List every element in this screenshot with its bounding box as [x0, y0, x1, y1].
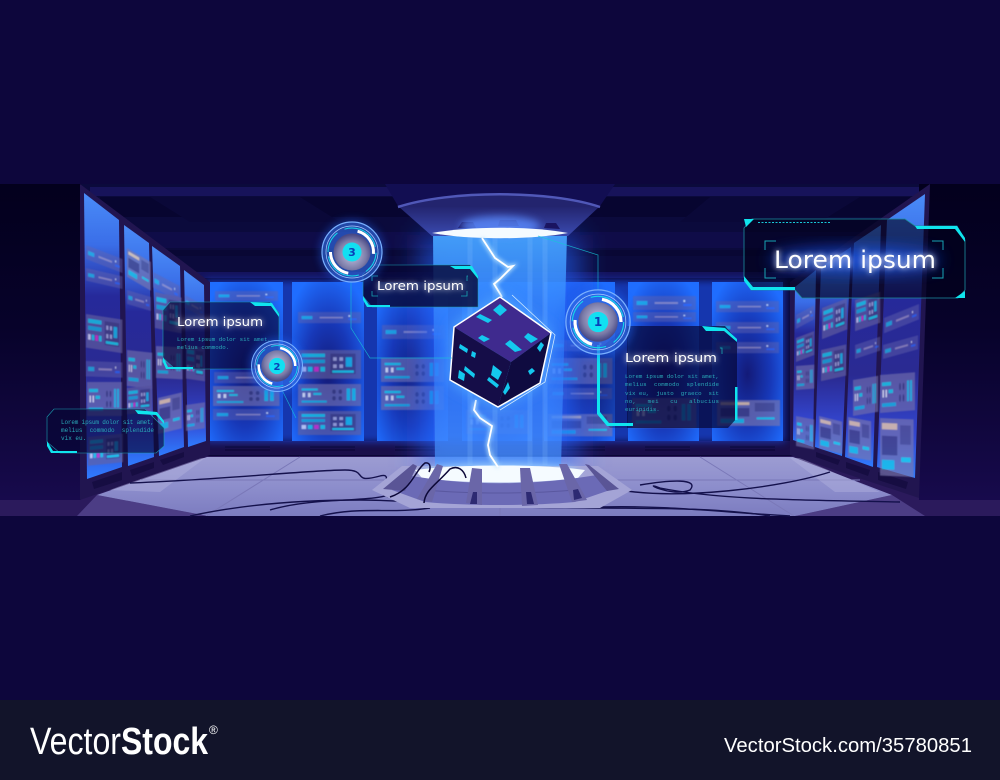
callout: item 1	[597, 326, 738, 428]
callout: Lorem ipsum title top right: Lorem ipsum	[774, 246, 936, 274]
icon: hud dial 3: 3	[348, 246, 356, 259]
icon: hud dial 3	[319, 219, 385, 285]
callout: item 1: melius commodo splendide	[625, 381, 720, 388]
logo: Vector	[30, 721, 121, 763]
footer bar	[0, 700, 1000, 780]
callout: left note: Lorem ipsum dolor sit amet,	[61, 419, 154, 426]
right rack server units	[796, 292, 919, 477]
icon: hud dial 1: 1	[594, 315, 602, 329]
callout: item 1: vix eu, justo graeco sit	[625, 390, 719, 397]
callout: item 2: Lorem ipsum dolor sit amet,	[177, 336, 271, 343]
floor	[0, 441, 1000, 517]
icon: hud dial 1	[562, 286, 634, 358]
logo: Stock	[121, 721, 209, 763]
callout: left note: melius commodo splendide	[61, 427, 154, 434]
connector lines	[282, 236, 598, 418]
icon: hud dial 2: 2	[274, 362, 281, 373]
floor emitter base	[372, 463, 632, 508]
lightning bolts	[474, 238, 513, 467]
ceiling	[0, 184, 1000, 284]
icon: hud dial 2	[249, 338, 305, 394]
image id: VectorStock.com/35780851	[724, 735, 972, 757]
callout: left note: vix eu.	[61, 435, 86, 442]
callout: item 2	[163, 302, 279, 369]
cables on floor	[130, 470, 900, 516]
glowing cube	[450, 295, 555, 410]
ceiling emitter	[385, 184, 615, 238]
energy column	[420, 233, 580, 468]
callout: item 3: Lorem ipsum	[377, 278, 464, 293]
back wall	[190, 278, 810, 456]
callout: item 3	[363, 265, 478, 307]
callout: Lorem ipsum title top right	[744, 219, 965, 298]
callout: item 1: Lorem ipsum dolor sit amet,	[625, 373, 719, 380]
callout: item 1: euripidis.	[625, 406, 660, 413]
logo	[30, 721, 218, 763]
callout: item 1: no, mei cu albucius	[625, 398, 719, 405]
left rack server units	[86, 245, 205, 466]
logo: ®	[209, 723, 218, 737]
callout: item 2: Lorem ipsum	[177, 314, 263, 329]
back wall glass panels	[205, 280, 785, 442]
callout: item 1: Lorem ipsum	[625, 350, 717, 365]
callout: left note	[47, 409, 164, 453]
callout: item 2: melius commodo.	[177, 344, 229, 351]
server units on back wall	[213, 291, 780, 436]
left server rack wall	[0, 184, 210, 500]
right server rack wall	[790, 184, 1000, 500]
